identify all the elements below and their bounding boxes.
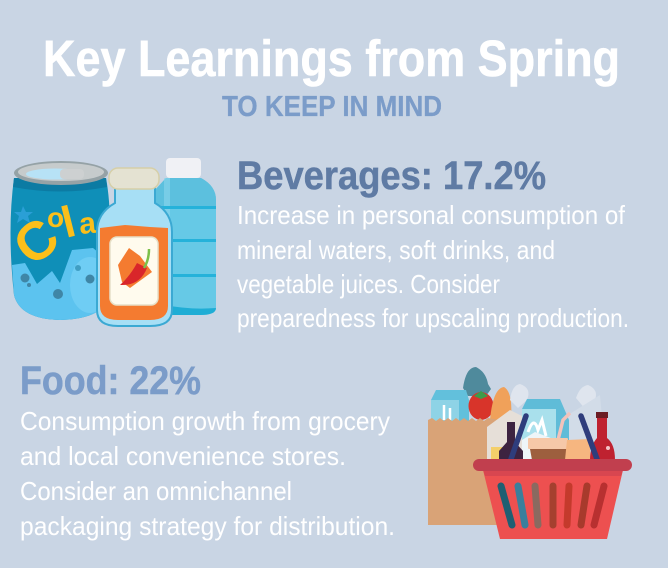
text block: food description: Consider an omnichannel: [20, 476, 292, 506]
icon: cheese: [491, 447, 503, 460]
icon: bread loaf: [565, 439, 590, 460]
label: cola lettering: o: [47, 202, 64, 233]
icon: paper bag: [428, 418, 500, 525]
heading: beverages: Beverages: 17.2%: [237, 154, 546, 198]
text block: food description: [20, 406, 395, 541]
icon: bread bags: [487, 384, 604, 460]
icon: tomato: [468, 391, 494, 420]
text block: beverages description: [237, 200, 629, 333]
label: cola lettering: a: [78, 207, 98, 241]
icon: wine bottle: [499, 422, 523, 460]
text block: beverages description: Increase in personal consumption of: [237, 200, 626, 230]
label: cola lettering: C: [2, 206, 71, 277]
icon: cola can: [2, 161, 110, 320]
icon: fish: [463, 367, 491, 396]
icon: water bottle: [154, 158, 216, 315]
heading: food: Food: 22%: [20, 359, 201, 403]
icon: grocery bag and basket: [428, 367, 632, 539]
icon: milk carton in bag: [431, 390, 469, 424]
icon: milk carton in basket: [522, 399, 569, 460]
text block: food description: and local convenience stores.: [20, 441, 346, 471]
icon: sauce bottle: [590, 412, 615, 460]
label: cola lettering: l: [57, 197, 80, 248]
icon: chili sauce bottle: [97, 168, 172, 326]
icon: straw: [558, 413, 570, 440]
subtitle: TO KEEP IN MIND: [222, 91, 442, 123]
icon: coffee cup: [528, 438, 568, 460]
icon: baguette: [490, 387, 511, 420]
text block: food description: Consumption growth from grocery: [20, 406, 390, 436]
text block: beverages description: vegetable juices. Consider: [237, 269, 500, 299]
icon: red basket: [473, 459, 632, 539]
icon: basket handles: [511, 416, 597, 459]
icon: beverages group: [2, 158, 216, 326]
text block: beverages description: mineral waters, soft drinks, and: [237, 235, 555, 265]
text block: food description: packaging strategy for distribution.: [20, 511, 395, 541]
